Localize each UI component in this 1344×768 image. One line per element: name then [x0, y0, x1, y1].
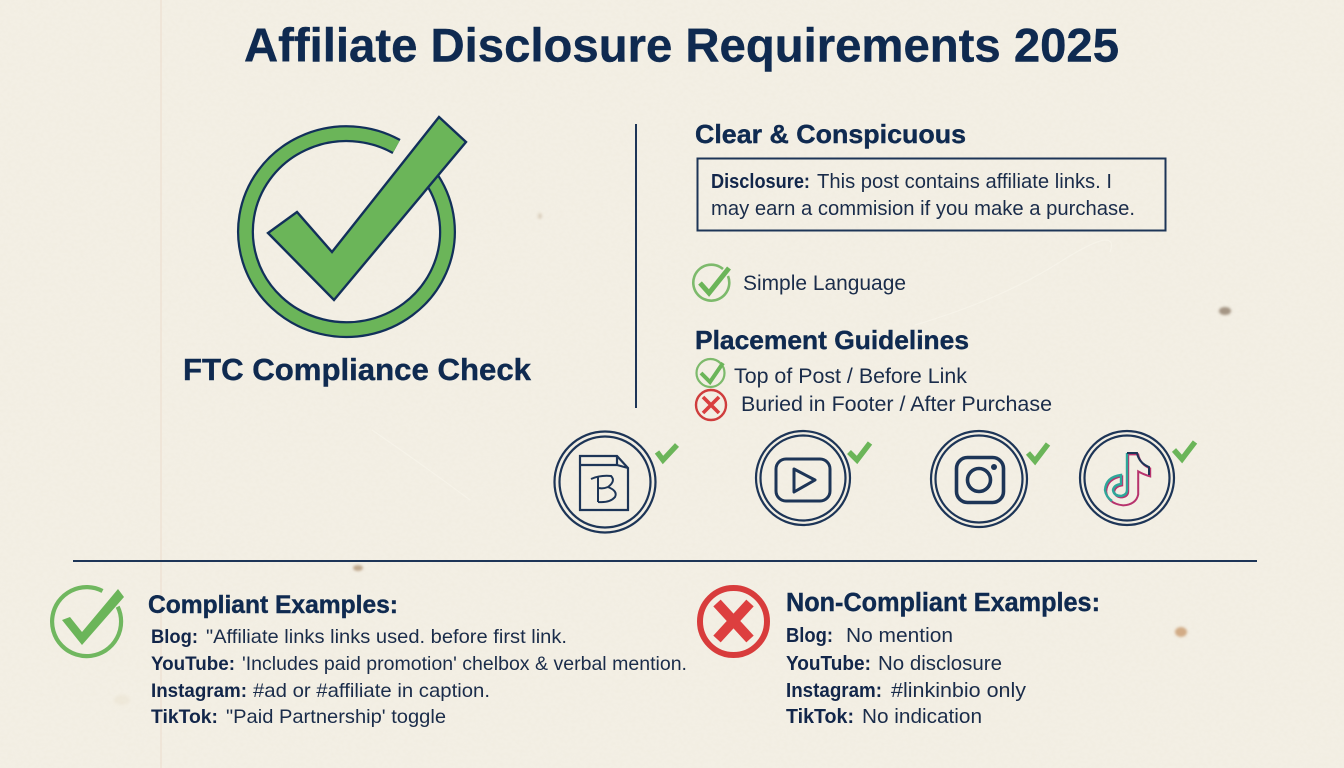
compliant rows: TikTok:: [151, 706, 218, 728]
non-compliant rows: #linkinbio only: [891, 680, 1026, 702]
item: buried in footer: Buried in Footer / After Purchase: [741, 393, 1052, 416]
non-compliant rows: [786, 625, 1026, 728]
non-compliant rows: No disclosure: [878, 653, 1002, 675]
item: simple language: [693, 265, 906, 301]
non-compliant rows: TikTok:: [786, 706, 854, 728]
item: top of post: [696, 359, 968, 388]
icon: non-compliant cross: [700, 588, 767, 655]
compliant rows: Instagram:: [151, 680, 247, 702]
disclosure box: may earn a commision if you make a purchase.: [711, 198, 1135, 220]
heading: compliant examples: Compliant Examples:: [148, 591, 398, 619]
icon: YouTube: [756, 431, 870, 525]
compliant rows: #ad or #affiliate in caption.: [253, 680, 490, 702]
vertical divider: [635, 124, 637, 408]
icon: large FTC compliance check mark: [245, 117, 466, 330]
item: top of post: Top of Post / Before Link: [734, 365, 968, 388]
disclosure box: This post contains affiliate links. I: [817, 171, 1112, 193]
title: Affiliate Disclosure Requirements 2025: [244, 18, 1119, 72]
icon: compliant check: [52, 587, 124, 656]
disclosure box: Disclosure:: [711, 171, 810, 193]
heading: Placement Guidelines: Placement Guidelines: [695, 325, 969, 355]
icon: blog: [554, 432, 677, 532]
icon: TikTok: [1080, 431, 1195, 525]
non-compliant rows: No indication: [862, 706, 982, 728]
panel: compliant examples: [52, 587, 687, 728]
horizontal divider: [73, 560, 1257, 562]
non-compliant rows: Instagram:: [786, 680, 882, 702]
heading: FTC Compliance Check: FTC Compliance Check: [183, 352, 532, 387]
non-compliant rows: No mention: [846, 625, 953, 647]
non-compliant rows: YouTube:: [786, 653, 871, 675]
heading: non-compliant examples: Non-Compliant Examples:: [786, 589, 1100, 617]
item: buried in footer: [696, 390, 1052, 420]
item: simple language: Simple Language: [743, 272, 906, 295]
compliant rows: "Paid Partnership' toggle: [226, 706, 446, 728]
panel: non-compliant examples: [700, 588, 1100, 728]
heading: Clear and Conspicuous: Clear & Conspicuous: [695, 119, 966, 149]
compliant rows: 'Includes paid promotion' chelbox & verbal mention.: [242, 653, 687, 675]
compliant rows: "Affiliate links links used. before first link.: [206, 626, 567, 648]
compliant rows: Blog:: [151, 626, 198, 648]
disclosure box: [698, 158, 1166, 230]
non-compliant rows: Blog:: [786, 625, 833, 647]
compliant rows: YouTube:: [151, 653, 235, 675]
icon: Instagram: [931, 431, 1048, 527]
compliant rows: [151, 626, 687, 728]
